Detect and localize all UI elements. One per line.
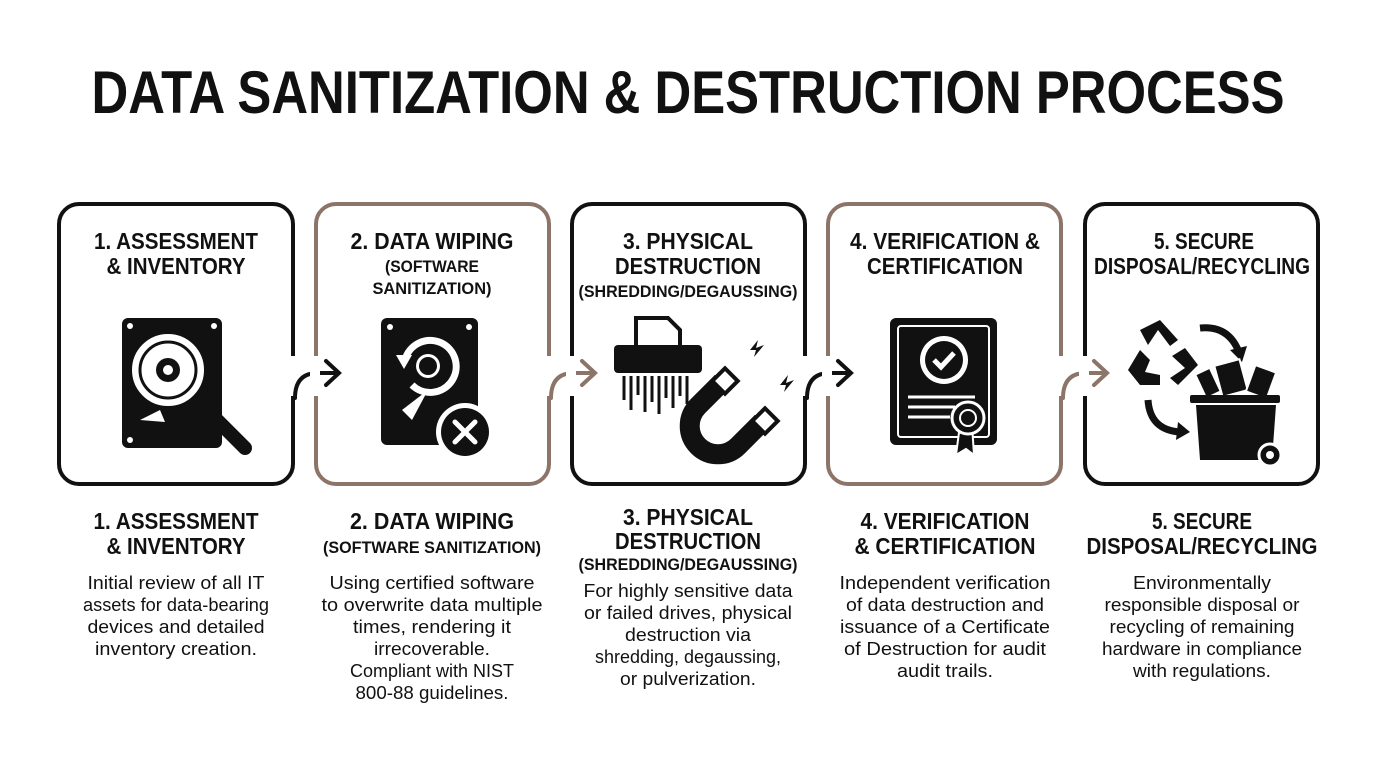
text block: step 1: assets for data-bearing [83, 595, 269, 615]
panel: 3 physical destruction [566, 204, 810, 484]
panel: 4 verification: 4. VERIFICATION & [850, 228, 1040, 254]
panel: 1 assessment: & INVENTORY [106, 253, 246, 279]
panel: 5 secure disposal: DISPOSAL/RECYCLING [1094, 253, 1310, 279]
text block: step 5: recycling of remaining [1110, 617, 1294, 637]
text block: step 2: Compliant with NIST [350, 661, 514, 681]
panel: 4 verification [822, 204, 1066, 484]
panel: 1 assessment [59, 204, 298, 484]
text block: step 1: 1. ASSESSMENT [94, 508, 258, 534]
text block: step 5: hardware in compliance [1102, 639, 1302, 659]
panel: 2 data wiping: (SOFTWARE [385, 257, 479, 276]
panel: 5 secure disposal [1079, 204, 1318, 484]
icon: certificate [890, 318, 997, 455]
panel: 4 verification: CERTIFICATION [867, 253, 1023, 279]
panel: 2 data wiping [310, 204, 554, 484]
text block: step 5: 5. SECURE [1152, 508, 1252, 534]
arrow: 2 to 3 [551, 361, 595, 398]
text block: step 4: Independent verification [840, 573, 1050, 593]
text block: step 3: or failed drives, physical [584, 603, 792, 623]
icon: shredder and magnet [614, 318, 794, 454]
text block: step 4: of data destruction and [846, 595, 1044, 615]
text block: step 2: to overwrite data multiple [322, 595, 542, 615]
text block: step 4: & CERTIFICATION [854, 533, 1036, 559]
text block: step 1: devices and detailed [88, 617, 264, 637]
text block: step 2: 800-88 guidelines. [356, 683, 508, 703]
text block: step 1: inventory creation. [95, 639, 257, 659]
icon: recycle bin [1128, 320, 1281, 466]
panel: 3 physical destruction: 3. PHYSICAL [623, 228, 753, 254]
text block: step 3: or pulverization. [620, 669, 756, 689]
text block: step 3: DESTRUCTION [615, 528, 761, 554]
text block: step 2: irrecoverable. [374, 639, 490, 659]
text block: step 5: responsible disposal or [1104, 595, 1300, 615]
text block: step 5: DISPOSAL/RECYCLING [1086, 533, 1318, 559]
icon: hard drive with wipe [381, 318, 494, 461]
text block: step 2: Using certified software [330, 573, 534, 593]
text block: step 1 [83, 508, 269, 659]
text block: step 1: Initial review of all IT [88, 573, 264, 593]
text block: step 4: issuance of a Certificate [840, 617, 1050, 637]
text block: step 3: destruction via [625, 625, 752, 645]
arrow: 3 to 4 [807, 361, 851, 398]
panel: 2 data wiping: SANITIZATION) [372, 279, 492, 298]
text block: step 3: (SHREDDING/DEGAUSSING) [578, 555, 798, 574]
text block: step 4: audit trails. [897, 661, 993, 681]
text block: step 2 [322, 508, 542, 703]
text block: step 5 [1086, 508, 1318, 681]
arrow: 1 to 2 [295, 361, 339, 398]
text block: step 5: Environmentally [1133, 573, 1271, 593]
panel: 5 secure disposal: 5. SECURE [1154, 228, 1254, 254]
panel: 3 physical destruction: DESTRUCTION [615, 253, 761, 279]
panel: 1 assessment: 1. ASSESSMENT [94, 228, 258, 254]
icon: hard drive with magnifier [122, 318, 245, 448]
arrow: 4 to 5 [1063, 361, 1107, 398]
text block: step 4: of Destruction for audit [844, 639, 1046, 659]
text block: step 3: shredding, degaussing, [595, 647, 781, 667]
text block: step 2: (SOFTWARE SANITIZATION) [323, 538, 541, 557]
text block: step 3: For highly sensitive data [584, 581, 794, 601]
text block: step 5: with regulations. [1132, 661, 1271, 681]
panel: 2 data wiping: 2. DATA WIPING [350, 228, 514, 254]
panel: 3 physical destruction: (SHREDDING/DEGAUSSING) [578, 282, 798, 301]
text block: step 4 [840, 508, 1050, 681]
text block: step 3 [578, 504, 798, 689]
text block: step 2: times, rendering it [353, 617, 511, 637]
text block: step 2: 2. DATA WIPING [350, 508, 514, 534]
text block: step 4: 4. VERIFICATION [860, 508, 1030, 534]
text block: step 1: & INVENTORY [106, 533, 246, 559]
text block: step 3: 3. PHYSICAL [623, 504, 753, 530]
